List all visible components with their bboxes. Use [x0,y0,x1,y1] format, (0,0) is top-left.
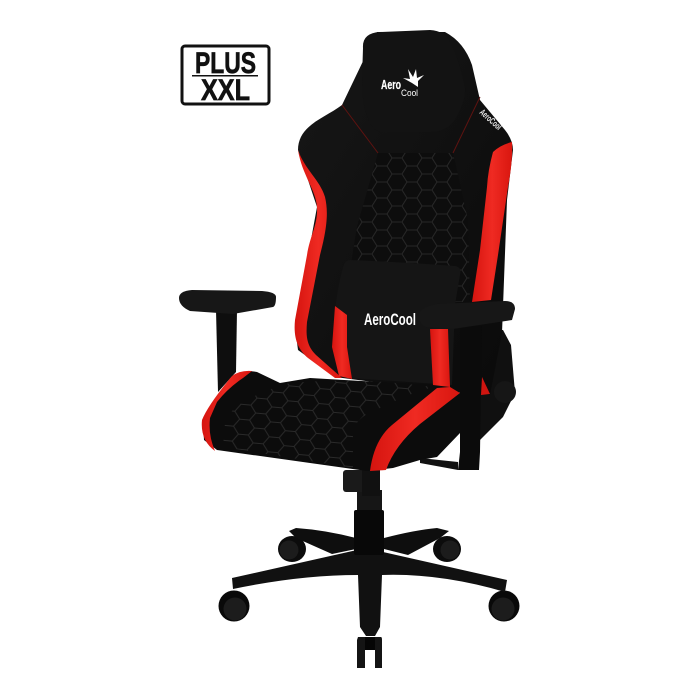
right armrest [419,301,515,470]
infographic canvas [179,30,520,668]
side logo: AeroCool [478,107,504,132]
seat right red bolster [370,387,460,471]
caster: front left [218,590,250,622]
right red strip [472,142,512,302]
badge: PLUS XXL: XXL [201,74,250,107]
base front legs [232,550,507,636]
seat hexagon panel [224,380,428,468]
headrest logo: Aero [381,77,401,92]
chair base [218,468,520,668]
lumbar red strip right [430,329,450,387]
headrest logo [381,69,424,98]
gas lift column [343,468,384,555]
left red wing [295,150,342,378]
badge: PLUS XXL [182,46,269,107]
caster: rear left [278,536,306,562]
small red strip by arm [481,377,490,395]
headrest pillow [362,30,465,133]
base rear legs [289,528,449,555]
backrest shell [295,32,513,395]
stitching [342,97,480,153]
backrest [295,30,513,395]
mechanism and rear strut [420,330,516,470]
lumbar pillow: AeroCool [364,310,416,329]
hexagon back panel [354,153,470,302]
caster: front right [488,590,520,622]
left armrest [179,290,276,392]
caster: front center [357,637,382,668]
headrest logo: Cool [401,88,418,98]
badge: PLUS XXL: PLUS [195,47,256,80]
seat [202,371,460,475]
lumbar pillow [335,260,460,385]
lumbar red strip left [332,306,352,379]
seat cushion [203,371,460,471]
caster: rear right [433,536,461,562]
seat left red edge [202,371,252,451]
